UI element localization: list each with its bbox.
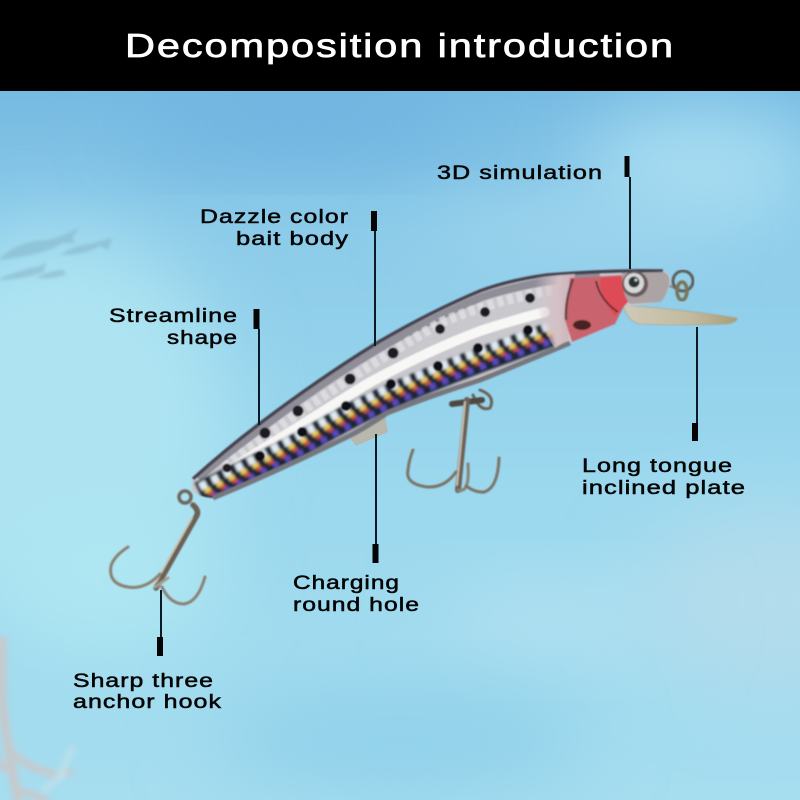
lure: diving lip <box>623 305 737 325</box>
background: pale coral bottom left <box>0 640 72 800</box>
background: distant fish school <box>0 227 112 280</box>
title: Decomposition introduction <box>125 27 675 64</box>
callout: Long tongue inclined plate: inclined plate <box>582 477 746 499</box>
callout: 3D simulation: 3D simulation <box>437 162 603 184</box>
callout: Streamline shape: shape <box>167 327 238 349</box>
callout: Long tongue inclined plate: Long tongue <box>582 455 733 477</box>
callout: 3D simulation <box>437 156 631 269</box>
lure: upper row spots <box>222 293 535 472</box>
lure: body <box>192 271 670 501</box>
lure: rear treble hook <box>111 491 205 604</box>
callout: Sharp three anchor hook: anchor hook <box>73 691 222 713</box>
callout: Charging round hole: round hole <box>293 594 420 616</box>
callout: Dazzle color bait body <box>200 206 377 346</box>
lure: charging port tab <box>350 416 388 446</box>
callout: Dazzle color bait body: bait body <box>236 228 349 250</box>
callout: Dazzle color bait body: Dazzle color <box>200 206 349 228</box>
lure: pink shoulder <box>535 274 575 348</box>
lure: top dark line <box>193 271 663 479</box>
callout: Sharp three anchor hook: Sharp three <box>73 670 214 692</box>
lure: lower row spots <box>255 325 533 461</box>
lure: grey belly edge <box>213 343 570 498</box>
callout: Charging round hole <box>293 434 420 616</box>
lure: eye <box>622 271 648 297</box>
lure: belly treble hook <box>408 390 499 492</box>
lure: holographic belly scales <box>200 325 554 501</box>
callout: Streamline shape: Streamline <box>109 305 238 327</box>
lure: head <box>622 272 669 304</box>
lure: gill plate <box>565 275 627 342</box>
title banner <box>0 0 800 91</box>
callout: Streamline shape <box>109 305 260 425</box>
callout: Sharp three anchor hook <box>73 590 222 713</box>
lure: split ring <box>667 271 693 300</box>
callout: Charging round hole: Charging <box>293 572 400 594</box>
lure: shaded back <box>198 277 600 478</box>
callout: Long tongue inclined plate <box>582 327 746 499</box>
lure: back highlight <box>225 289 560 467</box>
lure: white lateral stripe <box>226 312 545 472</box>
